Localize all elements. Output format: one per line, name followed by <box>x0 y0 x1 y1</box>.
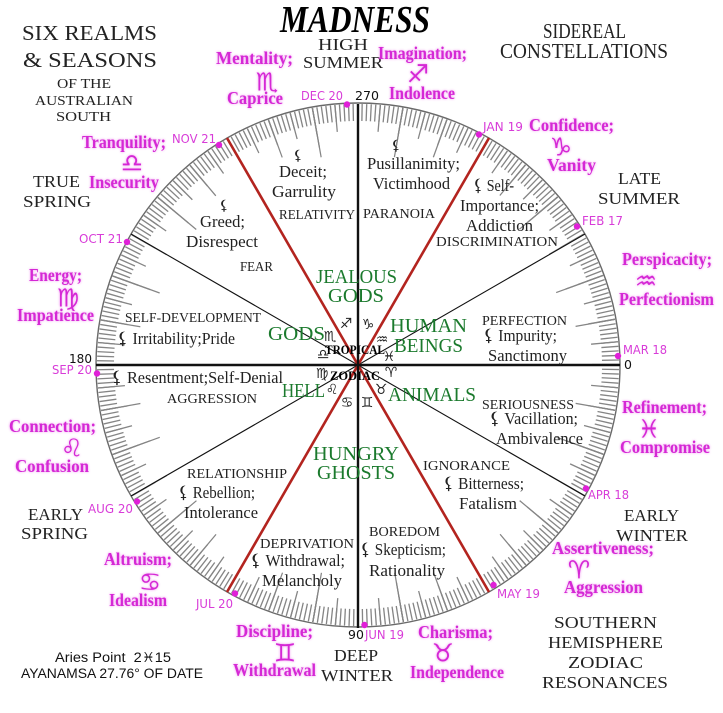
resonance: sagittarius: Imagination; <box>378 43 467 63</box>
resonance: aquarius: Perspicacity; <box>622 249 712 269</box>
resonance: capricorn: Vanity <box>547 155 596 175</box>
season: late summer: SUMMER <box>598 189 681 208</box>
resonance: pisces: Refinement; <box>622 397 707 417</box>
sector: fear: Greed; <box>200 212 245 231</box>
sector: discrimination: Addiction <box>466 216 533 235</box>
sector: aggression: AGGRESSION <box>167 392 257 407</box>
tropical zodiac hub: TROPICAL <box>325 342 385 357</box>
realm: gods: GODS <box>268 323 325 345</box>
tropical zodiac hub: ♓︎ <box>383 349 395 365</box>
resonance: cancer: Altruism; <box>104 549 172 569</box>
realm: human beings <box>390 315 467 357</box>
resonance: scorpio: Caprice <box>227 88 283 108</box>
season: true spring <box>23 172 91 211</box>
resonance: sagittarius: Indolence <box>389 83 455 103</box>
resonance: pisces: Compromise <box>620 437 710 457</box>
heading: six realms: AUSTRALIAN <box>35 94 133 109</box>
sector: ignorance: ⚸ Bitterness; <box>443 474 524 493</box>
resonance: gemini: Discipline; <box>236 621 313 641</box>
tropical zodiac hub: ♋︎ <box>341 395 353 411</box>
sector: paranoia: Victimhood <box>373 174 450 193</box>
sector: self-development: ⚸ Irritability;Pride <box>117 329 235 348</box>
season: early winter: EARLY <box>624 506 679 525</box>
realm: jealous gods <box>316 266 397 307</box>
resonance: libra: Insecurity <box>89 172 159 192</box>
resonance: leo: Confusion <box>15 456 89 476</box>
resonance: cancer <box>104 549 172 610</box>
degree labels: 270 <box>355 88 379 103</box>
aries point note <box>21 650 203 681</box>
tropical zodiac hub <box>316 316 398 411</box>
resonance: libra: ♎︎ <box>121 148 143 178</box>
sector: paranoia <box>363 138 460 222</box>
sector: deprivation: DEPRIVATION <box>260 537 354 552</box>
sector: aggression: ⚸ Resentment;Self-Denial <box>111 368 283 387</box>
realm: jealous gods: JEALOUS <box>316 266 397 288</box>
sector: ignorance <box>423 459 524 513</box>
sector: discrimination <box>436 176 558 250</box>
season: deep winter <box>321 646 394 685</box>
sector: relationship: ⚸ Rebellion; <box>178 483 255 502</box>
heading: sidereal constellations: CONSTELLATIONS <box>500 39 668 63</box>
tropical zodiac hub: ♌︎ <box>326 382 338 398</box>
protractor dial <box>96 103 620 628</box>
resonance: scorpio: Mentality; <box>216 48 293 68</box>
season: high summer <box>303 35 384 72</box>
date labels: NOV 21 <box>172 131 216 146</box>
tropical zodiac hub: ZODIAC <box>330 368 380 383</box>
resonance: pisces <box>620 397 710 457</box>
sector: boredom: Rationality <box>369 561 446 580</box>
resonance: capricorn: Confidence; <box>529 115 614 135</box>
sector: ignorance: Fatalism <box>459 494 517 513</box>
tropical zodiac hub: ♊︎ <box>361 395 373 411</box>
degree labels: 0 <box>624 357 632 372</box>
resonance: aquarius <box>619 249 714 309</box>
sector: seriousness: SERIOUSNESS <box>482 398 574 413</box>
resonance: scorpio <box>216 48 293 108</box>
date labels: MAY 19 <box>497 586 540 601</box>
season: early spring: EARLY <box>28 505 83 524</box>
sector: relativity <box>272 148 355 223</box>
sector: discrimination: DISCRIMINATION <box>436 235 558 250</box>
resonance: virgo: Energy; <box>29 265 82 285</box>
tropical zodiac hub: ♍︎ <box>316 366 328 382</box>
resonance: sagittarius <box>378 43 467 103</box>
resonance: virgo: ♍︎ <box>57 284 79 312</box>
sector: relativity: Garrulity <box>272 182 336 201</box>
resonance: aquarius: Perfectionism <box>619 289 714 309</box>
season: high summer: SUMMER <box>303 53 384 72</box>
sector: relativity: RELATIVITY <box>279 208 355 223</box>
sector: deprivation: Melancholy <box>262 571 342 590</box>
heading: six realms: SIX REALMS <box>22 21 157 45</box>
season: late summer: LATE <box>618 169 661 188</box>
heading: six realms <box>22 21 157 125</box>
sector: self-development <box>117 311 261 348</box>
resonance: cancer: ♋︎ <box>139 568 161 596</box>
date labels: SEP 20 <box>52 362 92 377</box>
sector: discrimination: ⚸ Self- <box>473 176 514 195</box>
resonance: libra <box>82 132 166 192</box>
tropical zodiac hub: ♉︎ <box>375 382 387 398</box>
resonance: aries: ♈︎ <box>568 556 590 584</box>
season: true spring: TRUE <box>33 172 80 191</box>
realm: jealous gods: GODS <box>328 285 384 307</box>
sector: seriousness <box>482 398 583 448</box>
tropical zodiac hub: ♎︎ <box>317 347 329 363</box>
sector: paranoia: ⚸ <box>391 138 401 154</box>
sector: relationship: Intolerance <box>184 503 258 522</box>
sector: aggression <box>111 368 283 407</box>
sector: self-development: SELF-DEVELOPMENT <box>125 311 261 326</box>
season: deep winter: WINTER <box>321 666 394 685</box>
resonance: aries: Aggression <box>564 577 643 597</box>
realm: human beings: BEINGS <box>394 335 463 357</box>
heading: southern hemisphere: ZODIAC <box>568 653 643 672</box>
sector: perfection: Sanctimony <box>488 346 567 365</box>
sector: perfection: PERFECTION <box>482 314 567 329</box>
sector: perfection: ⚸ Impurity; <box>483 326 557 345</box>
sector: fear <box>186 198 274 275</box>
resonance: libra: Tranquility; <box>82 132 166 152</box>
sector: deprivation: ⚸ Withdrawal; <box>250 551 345 570</box>
season: true spring: SPRING <box>23 192 91 211</box>
resonance: aries <box>552 538 654 597</box>
season: high summer: HIGH <box>318 35 368 54</box>
tropical zodiac hub: ♒︎ <box>376 332 388 348</box>
resonance: aries: Assertiveness; <box>552 538 654 558</box>
date labels: JUL 20 <box>195 596 233 611</box>
sector: boredom: BOREDOM <box>369 525 441 540</box>
resonance: aquarius: ♒︎ <box>635 266 657 296</box>
heading: sidereal constellations: SIDEREAL <box>543 19 626 43</box>
resonance: taurus: Independence <box>410 662 504 682</box>
realm: hungry ghosts <box>313 443 399 484</box>
sector: perfection <box>482 314 567 365</box>
resonance: virgo: Impatience <box>17 305 94 325</box>
heading: six realms: SOUTH <box>56 110 111 125</box>
heading: southern hemisphere: SOUTHERN <box>554 613 657 632</box>
realm: human beings: HUMAN <box>390 315 467 337</box>
tropical zodiac hub: ♑︎ <box>362 317 374 333</box>
date labels: OCT 21 <box>79 231 123 246</box>
resonance: leo <box>9 416 96 476</box>
resonance: leo: Connection; <box>9 416 96 436</box>
resonance: pisces: ♓︎ <box>638 414 660 444</box>
sector: seriousness: ⚸ Vacillation; <box>489 409 578 428</box>
realm: hungry ghosts: GHOSTS <box>317 462 395 484</box>
aries point note: AYANAMSA 27.76° OF DATE <box>21 666 203 681</box>
resonance: taurus <box>410 622 504 682</box>
sector: relationship: RELATIONSHIP <box>187 467 287 482</box>
season: early winter: WINTER <box>616 526 689 545</box>
sector: paranoia: PARANOIA <box>363 207 436 222</box>
sector: fear: ⚸ <box>219 198 229 214</box>
date labels: JAN 19 <box>482 119 523 134</box>
sector: paranoia: Pusillanimity; <box>367 154 460 173</box>
resonance: capricorn <box>529 115 614 175</box>
realm: hell: HELL <box>282 380 325 402</box>
sector: boredom <box>360 525 446 580</box>
resonance: sagittarius: ♐︎ <box>407 60 429 88</box>
sector: relativity: Deceit; <box>279 162 327 181</box>
date labels: DEC 20 <box>301 88 343 103</box>
resonance: scorpio: ♏︎ <box>256 68 278 96</box>
heading: six realms: & SEASONS <box>23 48 157 72</box>
season: early winter <box>616 506 689 545</box>
sector: fear: Disrespect <box>186 232 258 251</box>
resonance: gemini: ♊︎ <box>274 638 296 668</box>
sector: relationship <box>178 467 287 522</box>
sector: fear: FEAR <box>240 260 274 275</box>
aries point note: Aries Point 2♓︎15 <box>55 650 171 665</box>
resonance: taurus: Charisma; <box>418 622 493 642</box>
date labels: AUG 20 <box>88 501 133 516</box>
resonance: leo: ♌︎ <box>61 434 83 462</box>
resonance: gemini: Withdrawal <box>233 660 316 680</box>
sector: ignorance: IGNORANCE <box>423 459 510 474</box>
realm: animals: ANIMALS <box>388 384 476 406</box>
sector: relativity: ⚸ <box>293 148 303 164</box>
heading: southern hemisphere: HEMISPHERE <box>548 633 663 652</box>
resonance: cancer: Idealism <box>109 590 167 610</box>
sector: seriousness: Ambivalence <box>496 429 583 448</box>
resonance: taurus: ♉︎ <box>432 638 454 668</box>
sector: discrimination: Importance; <box>460 196 539 215</box>
tropical zodiac hub: ♏︎ <box>324 329 337 345</box>
resonance: gemini <box>233 621 316 680</box>
date markers <box>94 101 621 628</box>
resonance: capricorn: ♑︎ <box>550 132 572 162</box>
degree labels: 180 <box>69 351 92 366</box>
tropical zodiac hub: ♐︎ <box>340 316 352 332</box>
season: deep winter: DEEP <box>334 646 378 665</box>
date labels <box>52 88 667 642</box>
date labels: JUN 19 <box>364 627 404 642</box>
resonance: virgo <box>17 265 94 325</box>
sector: boredom: ⚸ Skepticism; <box>360 540 446 559</box>
title: MADNESS <box>279 0 430 41</box>
season: early spring <box>21 505 88 543</box>
heading: six realms: OF THE <box>57 77 111 92</box>
date labels: APR 18 <box>588 487 629 502</box>
heading: southern hemisphere: RESONANCES <box>542 673 668 692</box>
degree labels <box>69 88 632 642</box>
heading: southern hemisphere <box>542 613 668 692</box>
degree labels: 90 <box>348 627 364 642</box>
realm: hungry ghosts: HUNGRY <box>313 443 399 465</box>
sector: deprivation <box>250 537 354 590</box>
heading: sidereal constellations <box>500 19 668 63</box>
date labels: MAR 18 <box>623 342 667 357</box>
season: early spring: SPRING <box>21 524 88 543</box>
tropical zodiac hub: ♈︎ <box>385 365 398 381</box>
season: late summer <box>598 169 681 208</box>
date labels: FEB 17 <box>582 213 623 228</box>
